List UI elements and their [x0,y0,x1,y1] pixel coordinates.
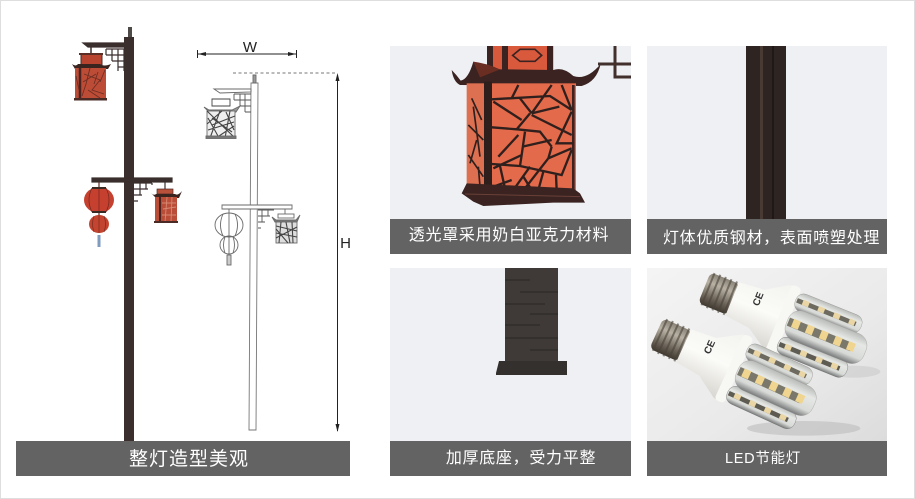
outline pole [249,75,258,430]
caption: whole lamp: 整灯造型美观 [129,448,249,470]
panel: base [390,268,631,476]
dimension W: W [243,39,258,56]
panel: lantern shade [390,46,631,254]
lattice fragment [598,46,631,77]
outline round lanterns [215,209,243,265]
lower arm and lattice [92,178,172,201]
caption: LED节能灯 [725,450,801,467]
outline upper lantern [204,89,251,138]
red lanterns [84,182,114,247]
panel: steel body [647,46,887,254]
outline lower arm [222,205,292,228]
right lantern [151,182,182,223]
illustration: colored double-arm lamp post [72,27,182,441]
caption: 加厚底座，受力平整 [446,444,596,468]
upper lantern [72,53,111,100]
caption: 透光罩采用奶白亚克力材料 [409,226,609,244]
outline right lantern [272,209,300,243]
base post [496,268,567,375]
caption [390,441,631,476]
caption [647,441,887,476]
caption [390,219,631,254]
caption: whole lamp [16,441,350,476]
dimension W [198,39,296,58]
dimension H [233,73,351,432]
illustration: outline lamp drawing [204,75,300,430]
upper arm and lattice [83,43,124,71]
panel: LED bulbs [641,254,887,476]
lantern closeup [452,46,631,206]
pole closeup [746,46,786,219]
caption: 灯体优质钢材，表面喷塑处理 [663,224,880,248]
pole [124,27,134,441]
caption [647,219,887,254]
dimension H: H [340,235,351,252]
bulbs photo [651,272,880,436]
